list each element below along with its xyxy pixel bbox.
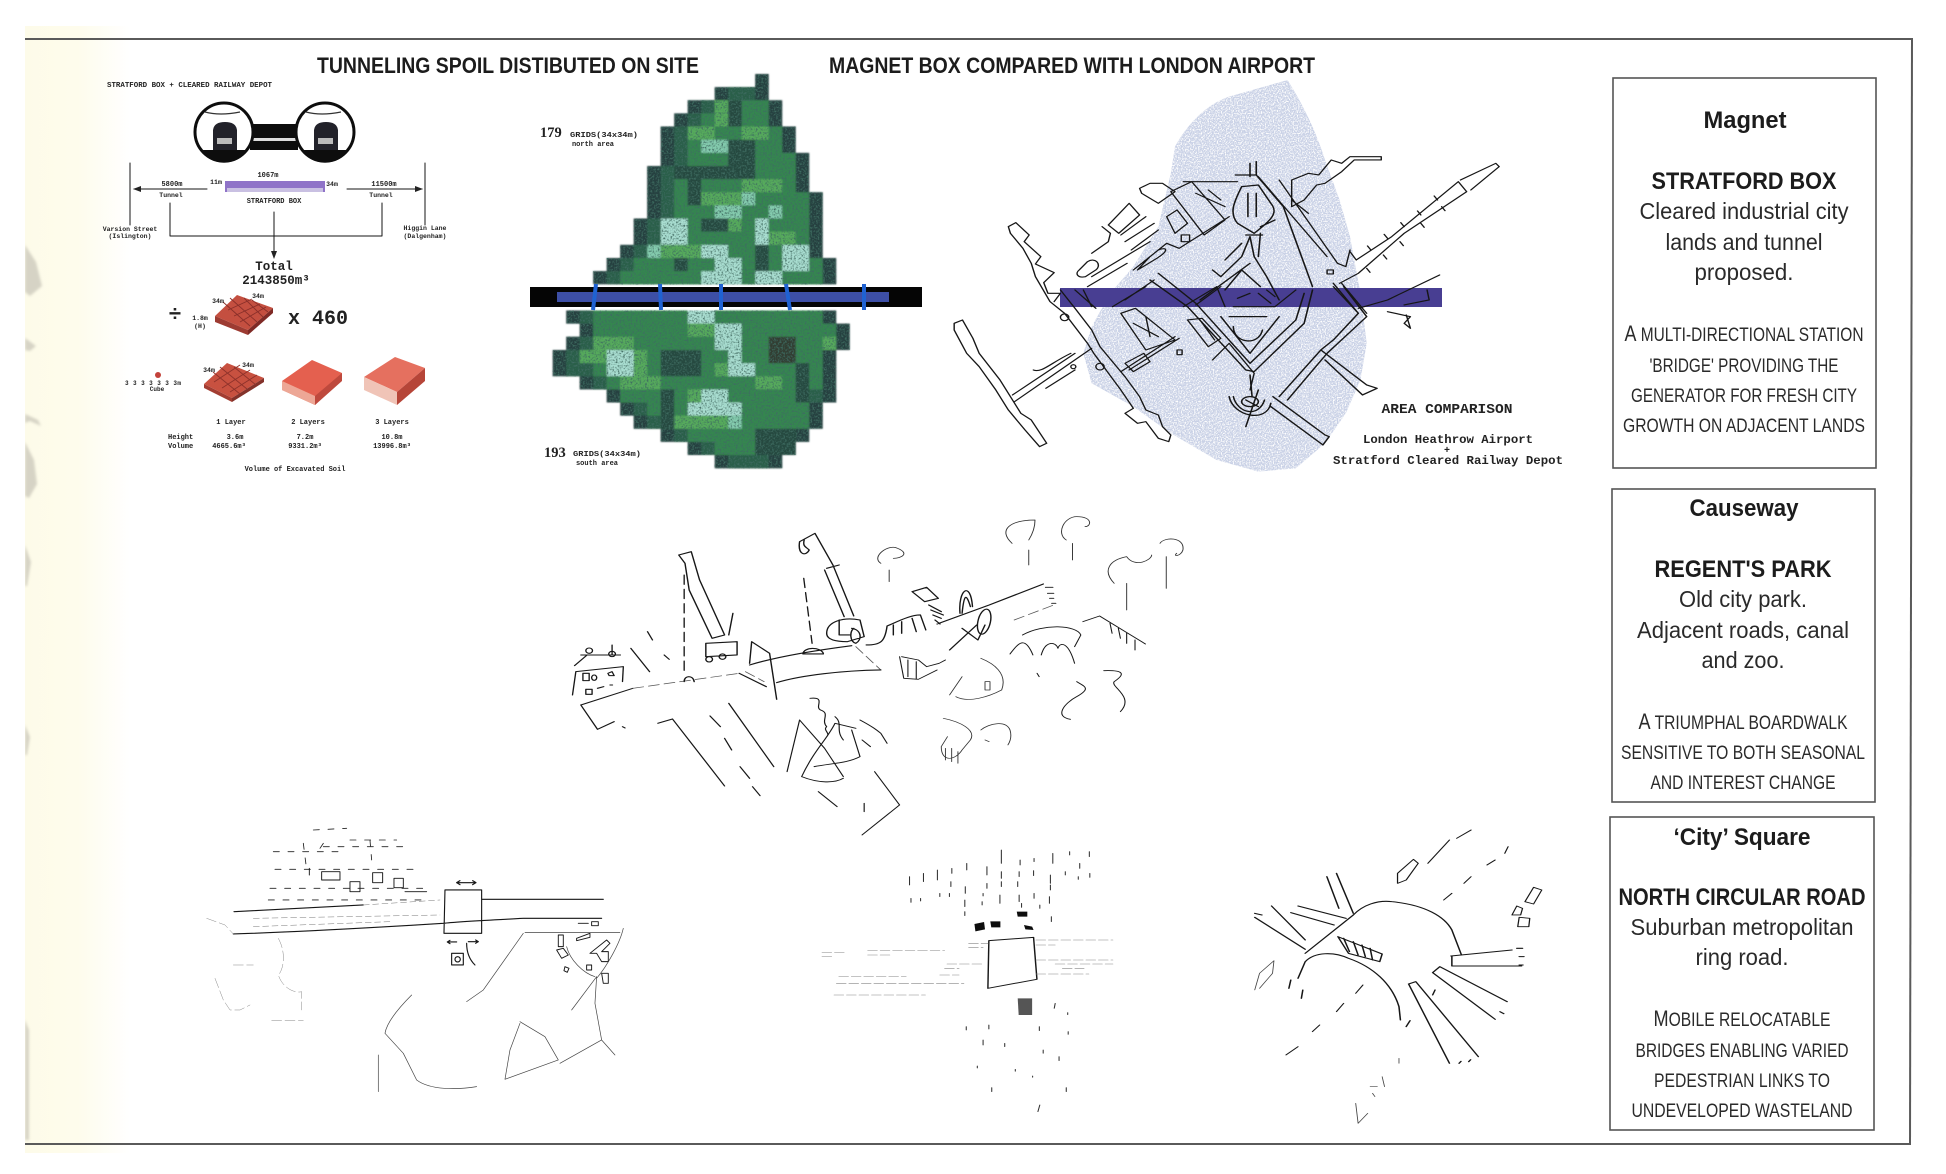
regent's park proposal: AND INTEREST CHANGE bbox=[1650, 773, 1836, 794]
regent's park proposal: SENSITIVE TO BOTH SEASONAL bbox=[1621, 743, 1865, 764]
stratford box bar bbox=[1060, 288, 1442, 307]
sketch: regent's park causeway bbox=[573, 517, 1183, 835]
layer table: 3.6m bbox=[227, 434, 243, 442]
panel: causeway bbox=[1612, 489, 1875, 802]
regent's park heading: REGENT'S PARK bbox=[1654, 556, 1832, 583]
north circular proposal bbox=[1632, 1006, 1852, 1122]
regent's park proposal bbox=[1621, 709, 1865, 794]
section dimension diagram: Varsion Street bbox=[103, 226, 157, 233]
area comparison caption: London Heathrow Airport bbox=[1363, 433, 1533, 447]
north circular proposal: PEDESTRIAN LINKS TO bbox=[1654, 1071, 1830, 1092]
area comparison caption: AREA COMPARISON bbox=[1382, 403, 1512, 418]
stratford description: lands and tunnel bbox=[1666, 229, 1822, 255]
layer table: 10.8m bbox=[381, 434, 403, 442]
panel: tunnelling spoil diagram bbox=[103, 82, 447, 474]
north circular description: Suburban metropolitan bbox=[1630, 914, 1854, 940]
layer table: 3 Layers bbox=[375, 419, 409, 427]
regent's park proposal: A TRIUMPHAL BOARDWALK bbox=[1638, 709, 1848, 734]
section dimension diagram: STRATFORD BOX bbox=[247, 198, 302, 206]
layer table: 1 Layer bbox=[216, 419, 246, 427]
slab: 1 layer: 34m bbox=[203, 367, 215, 374]
layer table: 2 Layers bbox=[291, 419, 325, 427]
stratford proposal: 'BRIDGE' PROVIDING THE bbox=[1650, 356, 1838, 377]
sketch: suburban ring road plan bbox=[822, 850, 1113, 1112]
section dimension diagram: Tunnel bbox=[369, 192, 393, 199]
regent's park description: Adjacent roads, canal bbox=[1637, 617, 1849, 643]
stratford proposal bbox=[1623, 321, 1865, 437]
total volume bbox=[242, 260, 310, 288]
sketch: relocatable bridge hub bbox=[1255, 830, 1542, 1123]
chart: green grid site map bbox=[530, 74, 922, 468]
station bar bbox=[530, 284, 922, 310]
north circular proposal: BRIDGES ENABLING VARIED bbox=[1636, 1041, 1848, 1062]
panel: magnet bbox=[1613, 78, 1876, 468]
page background bbox=[25, 26, 108, 1153]
slab: 3 layers sides bbox=[315, 368, 425, 405]
regent's park description: Old city park. bbox=[1679, 586, 1807, 612]
heading: magnet box compared: MAGNET BOX COMPARED WITH LONDON AIRPORT bbox=[829, 53, 1315, 78]
stratford description: proposed. bbox=[1694, 259, 1794, 285]
causeway heading: Causeway bbox=[1690, 495, 1799, 522]
label: north area: 179 bbox=[540, 125, 562, 141]
label: south area: 193 bbox=[544, 445, 566, 461]
slab: 2 layers side bbox=[282, 381, 315, 405]
stratford proposal: GENERATOR FOR FRESH CITY bbox=[1631, 386, 1857, 407]
slab divided, multiplied by 460 bbox=[168, 293, 348, 335]
area blob bbox=[1083, 80, 1367, 472]
slab divided, multiplied by 460: (H) bbox=[194, 323, 206, 330]
north circular description bbox=[1630, 914, 1854, 970]
slab: 3 layers bbox=[364, 357, 425, 392]
stratford description: Cleared industrial city bbox=[1640, 198, 1849, 224]
label: north area: north area bbox=[572, 141, 615, 149]
area comparison caption bbox=[1333, 403, 1563, 468]
cube key bbox=[125, 372, 181, 393]
layer table: Volume of Excavated Soil bbox=[245, 466, 345, 474]
area comparison caption: + bbox=[1444, 446, 1450, 457]
stratford proposal: GROWTH ON ADJACENT LANDS bbox=[1623, 416, 1865, 437]
section dimension diagram: (Dalgenham) bbox=[404, 233, 446, 240]
section dimension diagram: 1067m bbox=[257, 172, 279, 180]
city square heading: ‘City’ Square bbox=[1674, 824, 1810, 851]
icon: twin tunnel section bbox=[195, 103, 354, 163]
label: north area bbox=[540, 125, 638, 149]
stratford proposal: A MULTI-DIRECTIONAL STATION bbox=[1624, 321, 1864, 346]
label: south area: south area bbox=[576, 460, 619, 468]
total volume: 2143850m³ bbox=[242, 274, 310, 288]
layer table: Volume bbox=[168, 443, 193, 451]
magnet heading: Magnet bbox=[1704, 107, 1787, 134]
regent's park description bbox=[1637, 586, 1849, 673]
north circular proposal: UNDEVELOPED WASTELAND bbox=[1632, 1101, 1852, 1122]
panel: city square bbox=[1610, 817, 1874, 1130]
slab divided, multiplied by 460: 34m bbox=[252, 293, 264, 300]
layer table: Height bbox=[168, 434, 193, 442]
regent's park description: and zoo. bbox=[1702, 647, 1784, 673]
section dimension diagram: Higgin Lane bbox=[404, 225, 447, 232]
layer table: 4665.6m³ bbox=[212, 443, 246, 451]
slab: 1 layer: 34m bbox=[242, 362, 254, 369]
stratford box heading: STRATFORD BOX bbox=[1652, 168, 1836, 195]
section dimension diagram: 34m bbox=[326, 181, 338, 188]
slab: 1 layer bbox=[203, 362, 264, 402]
layer table bbox=[168, 419, 411, 474]
label: south area: GRIDS(34x34m) bbox=[573, 451, 641, 459]
layer table: 9331.2m³ bbox=[288, 443, 322, 451]
diagram caption: STRATFORD BOX + CLEARED RAILWAY DEPOT bbox=[107, 82, 273, 90]
label: south area bbox=[544, 445, 641, 468]
north circular road heading: NORTH CIRCULAR ROAD bbox=[1618, 884, 1866, 911]
total volume: Total bbox=[255, 260, 293, 274]
section dimension diagram: 11500m bbox=[371, 181, 397, 189]
area comparison caption: Stratford Cleared Railway Depot bbox=[1333, 454, 1563, 468]
cube key: 3 3 3 3 3 3 3m bbox=[125, 380, 181, 387]
label: north area: GRIDS(34x34m) bbox=[570, 132, 638, 140]
section dimension diagram: 5800m bbox=[161, 181, 183, 189]
slab: 2 layers bbox=[282, 360, 342, 405]
section dimension diagram bbox=[103, 163, 447, 259]
section dimension diagram: Tunnel bbox=[159, 192, 183, 199]
stratford description bbox=[1640, 198, 1849, 285]
layer table: 7.2m bbox=[297, 434, 313, 442]
slab divided, multiplied by 460: 1.8m bbox=[192, 315, 208, 322]
cube key: Cube bbox=[150, 386, 165, 393]
slab divided, multiplied by 460: 34m bbox=[212, 298, 224, 305]
layer table: 13996.8m³ bbox=[373, 443, 411, 451]
chart: airport plan comparison bbox=[954, 80, 1563, 472]
slab divided, multiplied by 460: ÷ bbox=[168, 303, 182, 328]
slab divided, multiplied by 460: x 460 bbox=[288, 308, 348, 331]
heading: tunneling spoil: TUNNELING SPOIL DISTIBUTED ON SITE bbox=[317, 53, 699, 78]
section dimension diagram: 11m bbox=[210, 179, 222, 186]
north circular proposal: MOBILE RELOCATABLE bbox=[1654, 1006, 1830, 1031]
airport linework bbox=[954, 157, 1499, 447]
north circular description: ring road. bbox=[1696, 944, 1788, 970]
sketch: north circular road bridge bbox=[207, 828, 623, 1092]
section dimension diagram: (Islington) bbox=[109, 233, 151, 240]
